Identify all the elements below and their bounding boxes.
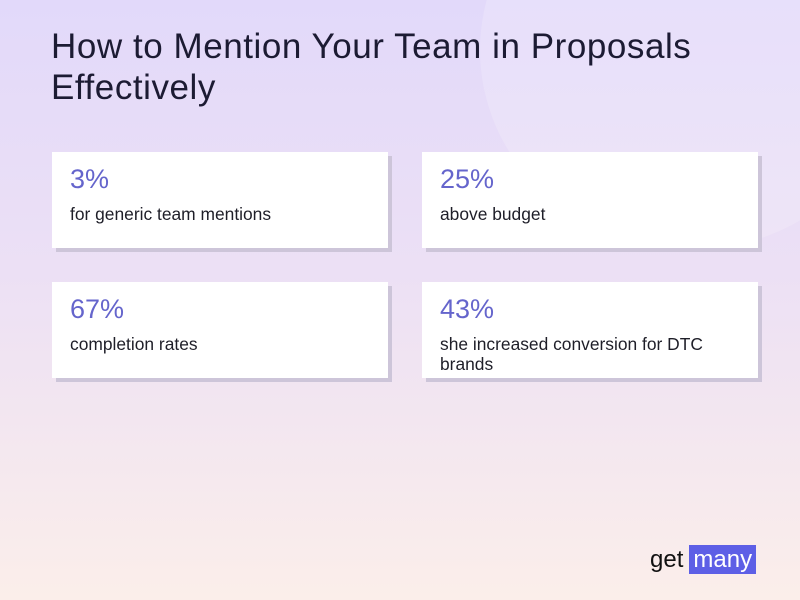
card: 67%: 67% [70, 294, 124, 324]
card: 43%: 43% [440, 294, 494, 324]
title: Effectively [51, 68, 216, 107]
card: 43%: she increased conversion for DTC brands [440, 334, 703, 374]
card: 3% [52, 152, 388, 248]
logo: many [693, 546, 752, 573]
card: 25%: 25% [440, 164, 494, 194]
logo [650, 545, 756, 574]
card: 43% [422, 282, 758, 378]
logo: get [650, 546, 683, 573]
card: 67% [52, 282, 388, 378]
title [51, 27, 691, 107]
card: 25%: above budget [440, 204, 545, 224]
title: How to Mention Your Team in Proposals [51, 27, 691, 66]
card: 67%: completion rates [70, 334, 198, 354]
card: 25% [422, 152, 758, 248]
card: 3%: for generic team mentions [70, 204, 271, 224]
card: 3%: 3% [70, 164, 109, 194]
